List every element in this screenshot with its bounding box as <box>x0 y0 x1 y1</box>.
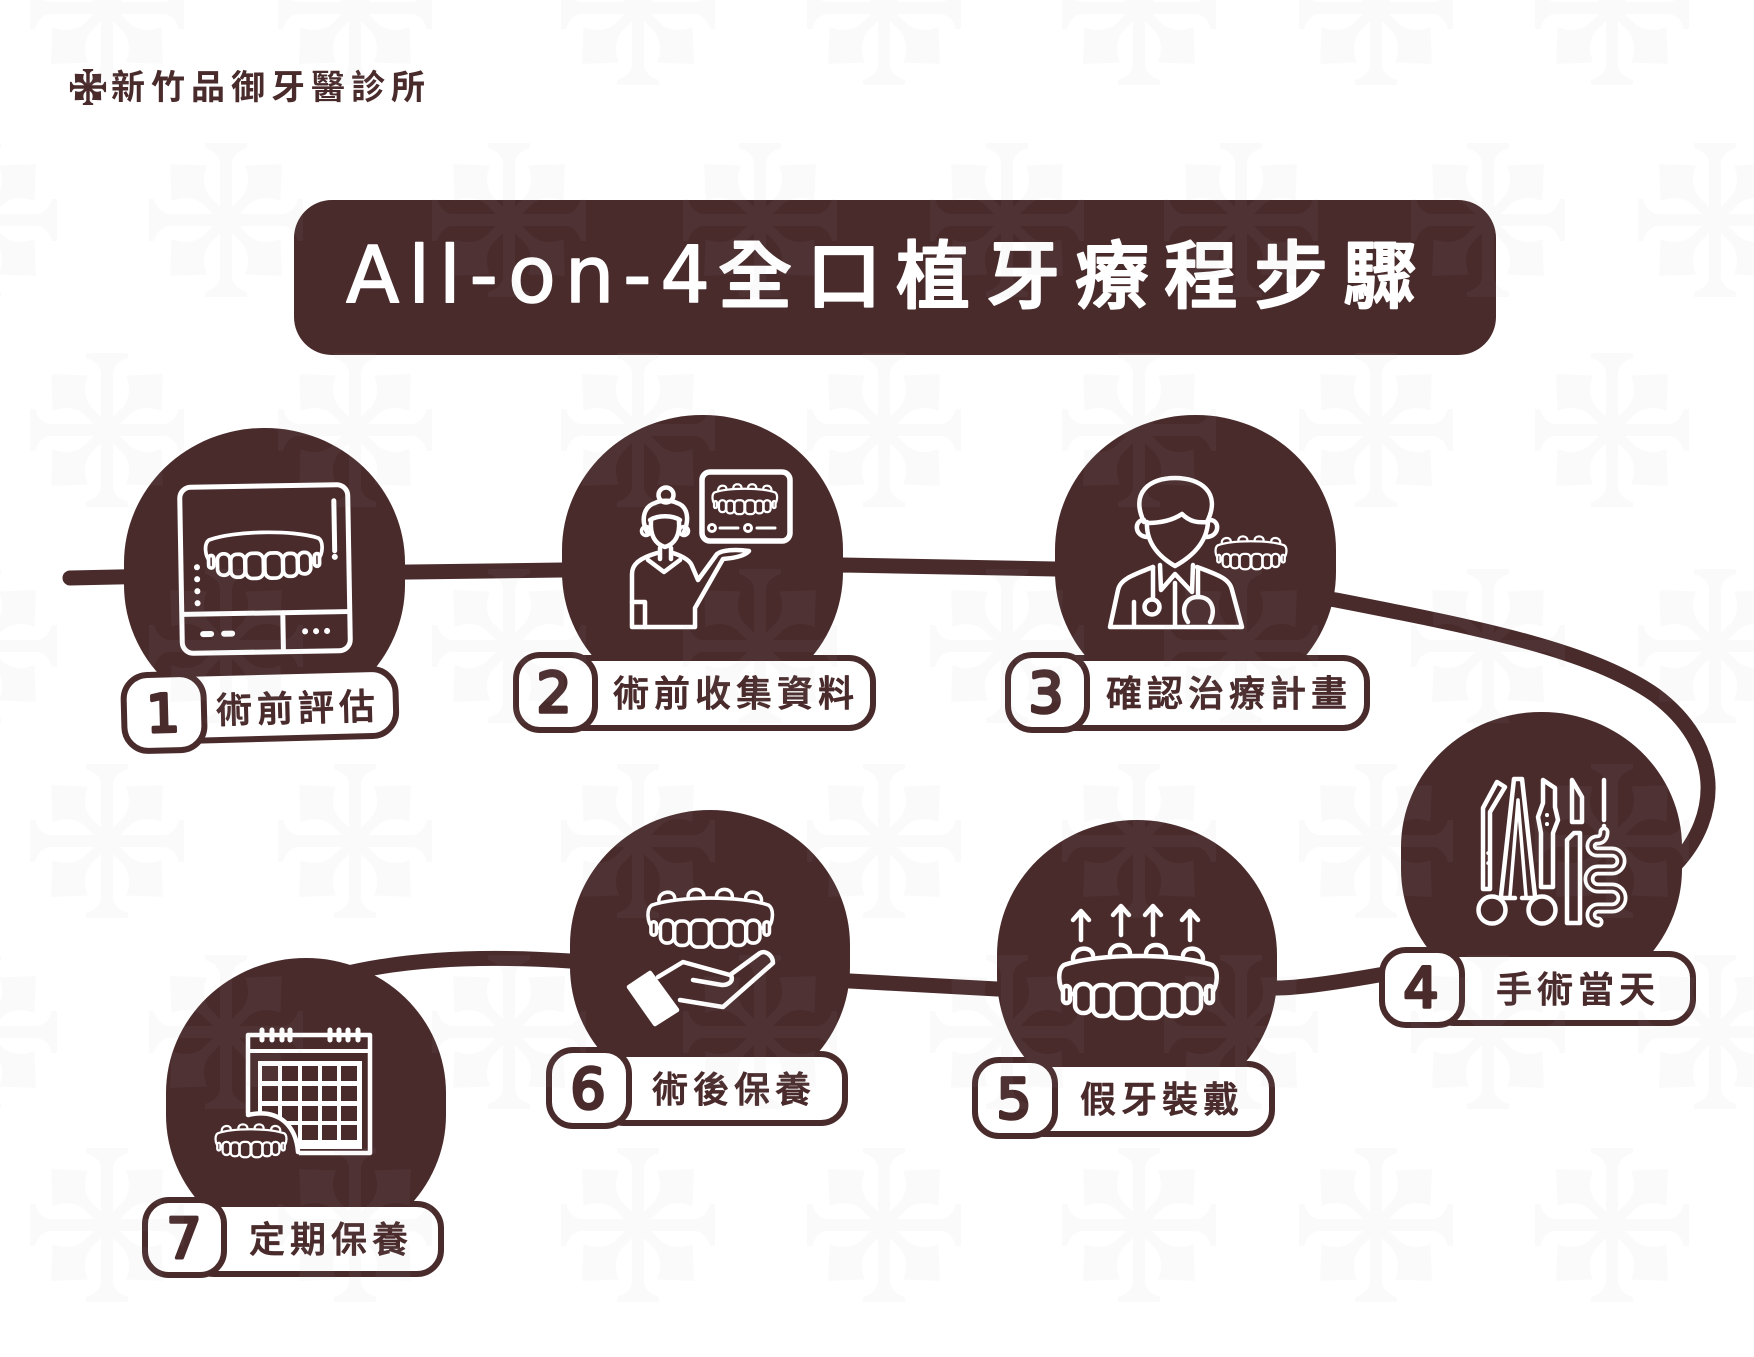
clinic logo <box>70 69 431 107</box>
label: number 7: 7 <box>166 1207 202 1271</box>
label: number 5 <box>975 1060 1272 1136</box>
icon: scanner tablet with denture <box>180 485 350 653</box>
circle <box>997 820 1277 1112</box>
step 5 <box>975 820 1277 1136</box>
step 7 <box>145 958 446 1275</box>
label: number 6: 術後保養 <box>652 1069 816 1110</box>
label: number 1: 術前評估 <box>215 686 380 731</box>
step 4 <box>1382 712 1693 1025</box>
label: number 3 <box>1008 655 1367 730</box>
label: number 2: 術前收集資料 <box>613 673 859 714</box>
label: number 7: 定期保養 <box>249 1219 413 1260</box>
circle <box>166 958 446 1250</box>
step 2 <box>516 415 873 730</box>
icon: denture with up arrows <box>1059 906 1217 1018</box>
icon: surgical instruments <box>1478 779 1622 924</box>
circle <box>124 428 405 720</box>
label: number 3: 3 <box>1028 661 1064 725</box>
circle <box>1401 712 1682 1004</box>
label: number 5: 假牙裝戴 <box>1080 1079 1244 1120</box>
step 1 <box>123 428 405 752</box>
label: number 4: 手術當天 <box>1496 969 1660 1010</box>
title text: 全口植牙療程步驟 <box>718 235 1417 318</box>
label: number 5: 5 <box>996 1067 1032 1131</box>
connecting path <box>70 565 1708 989</box>
label: number 1 <box>123 668 397 752</box>
step 6 <box>549 810 850 1126</box>
label: number 2: 2 <box>536 661 572 725</box>
label: number 3: 確認治療計畫 <box>1106 673 1352 714</box>
icon: dentist with stethoscope <box>1110 478 1286 627</box>
title text <box>346 231 1417 321</box>
clinic name: 新竹品御牙醫診所 <box>111 69 431 107</box>
icon: assistant presenting screen <box>632 472 790 627</box>
icon: calendar with denture <box>210 1030 370 1157</box>
label: number 6 <box>549 1050 845 1126</box>
circle <box>562 415 843 707</box>
circle <box>570 810 850 1102</box>
circle <box>1055 415 1336 707</box>
step 3 <box>1008 415 1367 730</box>
label: number 6: 6 <box>570 1057 606 1121</box>
label: number 4: 4 <box>1404 956 1438 1020</box>
icon: clinic emblem <box>70 69 106 105</box>
icon: hand holding denture <box>629 889 773 1024</box>
label: number 1: 1 <box>146 684 180 745</box>
label: number 4 <box>1382 950 1693 1025</box>
title banner <box>294 200 1496 355</box>
label: number 7 <box>145 1200 441 1275</box>
label: number 2 <box>516 655 873 730</box>
title text: All-on-4 <box>346 231 710 321</box>
